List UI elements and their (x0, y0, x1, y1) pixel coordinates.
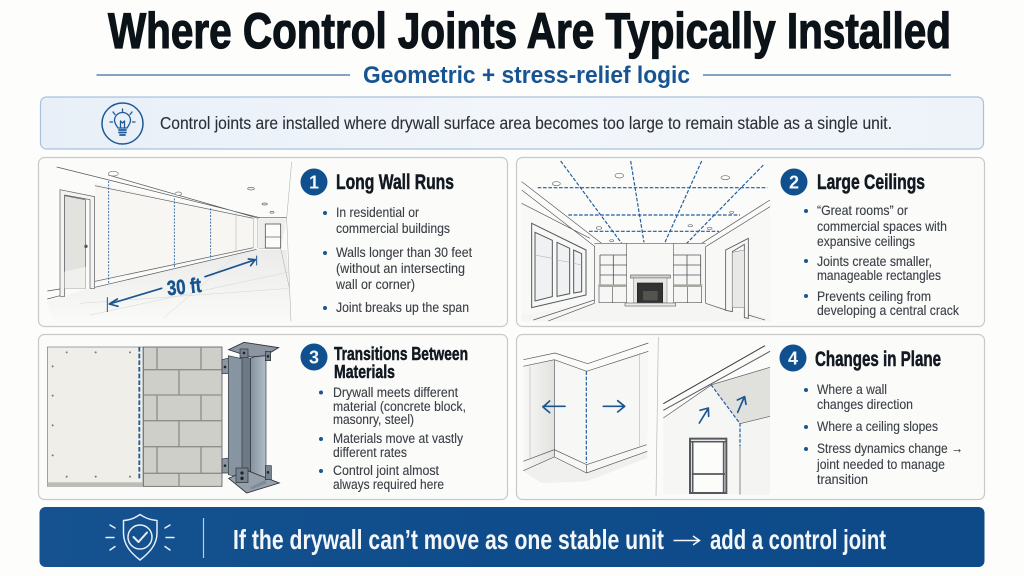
bullet list: changes direction (817, 396, 913, 412)
bullet list: Joints create smaller, (817, 253, 932, 269)
panel 1: long wall runs (38, 158, 508, 326)
door (726, 238, 748, 318)
heading: changes in plane: 4 (788, 348, 798, 368)
bullet list: In residential or (336, 204, 419, 220)
arrows: ceiling slope (699, 397, 746, 423)
bullet list: Materials move at vastly (333, 431, 463, 446)
heading: transitions between materials (300, 343, 468, 382)
bullet list: manageable rectangles (817, 267, 941, 283)
callout: key idea (40, 97, 984, 149)
bullet list: wall or corner) (335, 276, 415, 292)
illustration: sloped ceiling (656, 337, 770, 496)
illustration: drywall, block and steel (47, 342, 279, 493)
bullet list: Walls longer than 30 feet (336, 244, 472, 260)
bullet list (804, 381, 963, 487)
panel 4: changes in plane (516, 334, 984, 500)
drywall sheet (47, 347, 143, 486)
bullet list: material (concrete block, (333, 399, 466, 414)
heading: changes in plane: Changes in Plane (815, 348, 941, 371)
bullet list (323, 204, 472, 315)
concrete block wall (143, 347, 222, 486)
bullet list: joint needed to manage (816, 456, 945, 472)
panel 3: transitions between materials (38, 334, 508, 500)
bullet list: “Great rooms” or (817, 202, 908, 218)
bullet list (804, 202, 960, 318)
banner: takeaway (40, 507, 984, 567)
bullet list: developing a central crack (817, 302, 960, 318)
bullet list: commercial spaces with (817, 218, 947, 234)
illustration: long wall with 30 ft dimension (47, 162, 292, 322)
bullet list: Drywall meets different (333, 385, 458, 400)
dimension arrow (107, 256, 257, 312)
callout: key idea: Control joints are installed where drywall surface area becomes too large to remain stable as a single unit. (160, 113, 892, 133)
icon: light bulb (102, 103, 143, 144)
dimension arrow: 30 ft (166, 274, 203, 300)
window (532, 223, 586, 308)
heading: long wall runs: 1 (309, 172, 319, 192)
bullet list: Control joint almost (333, 463, 439, 478)
bullet list: Prevents ceiling from (817, 288, 931, 304)
bullet list: always required here (333, 477, 444, 492)
bullet list: Where a wall (817, 381, 887, 397)
heading: large ceilings: Large Ceilings (817, 171, 925, 194)
bullet list: transition (817, 471, 868, 487)
heading: transitions between materials: Materials (334, 361, 395, 382)
heading: changes in plane (780, 344, 941, 372)
illustration: wall corner (523, 343, 648, 483)
bullet list: Stress dynamics change → (817, 440, 963, 456)
bullet list: Where a ceiling slopes (817, 418, 938, 434)
recessed lights (552, 173, 734, 242)
control joint (137, 347, 142, 480)
heading: long wall runs: Long Wall Runs (336, 171, 454, 194)
bullet list: Joint breaks up the span (336, 299, 469, 315)
arrows: wall direction (543, 401, 625, 413)
heading: large ceilings: 2 (789, 172, 799, 192)
fireplace and built-ins (598, 255, 702, 306)
bullet list: commercial buildings (336, 220, 450, 236)
bullet list (319, 385, 466, 492)
heading: transitions between materials: 3 (309, 348, 319, 368)
ceiling joints (538, 161, 767, 243)
subtitle with rules: Geometric + stress-relief logic (363, 62, 690, 89)
steel column (222, 342, 279, 493)
takeaway text: If the drywall can’t move as one stable unit (233, 524, 664, 555)
heading: transitions between materials: Transitions Between (334, 343, 468, 364)
bullet list: different rates (333, 445, 407, 460)
panel 2: large ceilings (516, 158, 984, 326)
bullet list: (without an intersecting (336, 260, 465, 276)
takeaway text: add a control joint (710, 524, 886, 555)
bullet list: masonry, steel) (333, 412, 414, 427)
heading: long wall runs (300, 168, 454, 196)
heading: large ceilings (780, 168, 925, 196)
illustration: room with ceiling joints (522, 161, 770, 322)
bullet list: expansive ceilings (817, 233, 915, 249)
icon: shield with check (106, 514, 174, 560)
